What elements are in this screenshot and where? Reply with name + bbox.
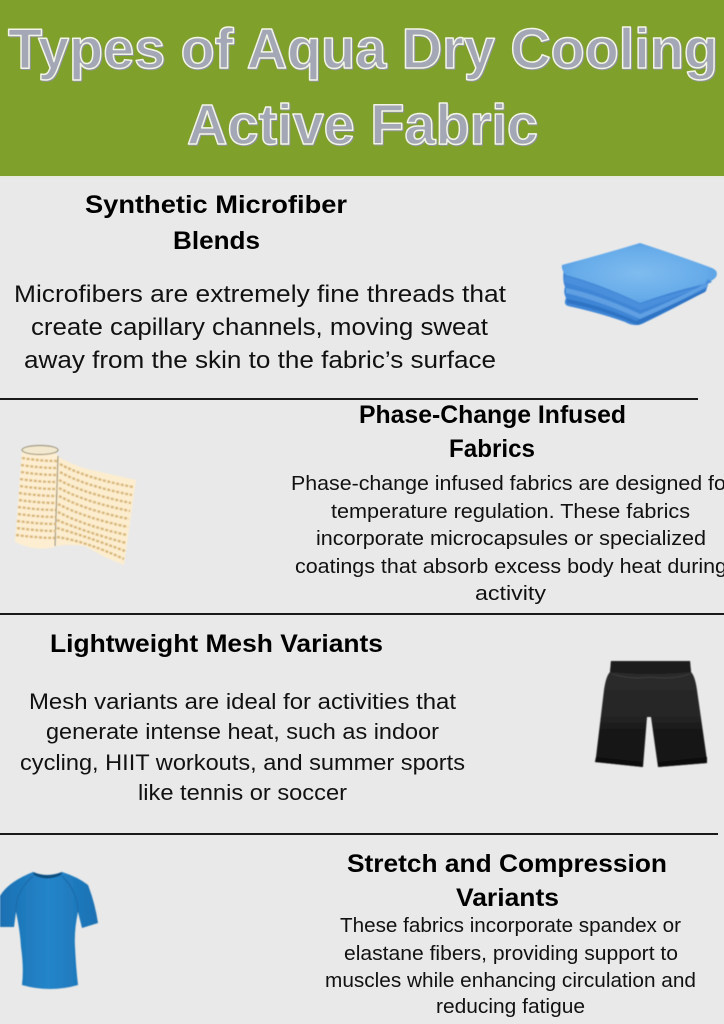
text block: microfibers: away from the skin to the fabric’s surface (24, 347, 496, 374)
text block: phase-change: incorporate microcapsules or specialized (316, 528, 706, 550)
divider (0, 398, 698, 400)
text block: stretch fabrics: muscles while enhancing circulation and (325, 970, 696, 992)
text block: phase-change: activity (475, 583, 546, 605)
heading: phase-change: Phase-Change Infused (359, 401, 626, 429)
text block: phase-change (291, 473, 724, 605)
heading: phase-change: Fabrics (449, 435, 535, 463)
text block: microfibers: Microfibers are extremely fine threads that (14, 281, 506, 308)
text block: stretch fabrics: These fabrics incorporate spandex or (340, 915, 681, 937)
icon: black shorts (595, 661, 707, 767)
divider (0, 613, 724, 615)
text block: mesh variants: Mesh variants are ideal for activities that (29, 689, 456, 714)
icon: folded blue towels (562, 243, 717, 325)
panel: phase-change infused fabrics (15, 401, 724, 605)
text block: phase-change: Phase-change infused fabrics are designed for (291, 473, 724, 495)
text block: mesh variants: like tennis or soccer (138, 780, 347, 805)
text block: mesh variants: generate intense heat, such as indoor (46, 719, 439, 744)
text block: stretch fabrics: reducing fatigue (436, 996, 585, 1018)
text block: mesh variants: cycling, HIIT workouts, and summer sports (20, 750, 465, 775)
heading: synthetic microfiber: Synthetic Microfiber (85, 191, 347, 219)
text block: stretch fabrics: elastane fibers, providing support to (344, 943, 678, 965)
heading: synthetic microfiber (85, 191, 347, 255)
heading: stretch and compression: Stretch and Compression (347, 850, 667, 878)
icon: blue t-shirt (0, 872, 98, 989)
panel: synthetic microfiber blends (14, 191, 717, 374)
icon: fabric roll (15, 446, 136, 565)
heading: lightweight mesh: Lightweight Mesh Variants (50, 630, 383, 658)
panel: lightweight mesh variants (20, 630, 707, 805)
panel: stretch and compression variants (0, 850, 696, 1018)
title (8, 17, 718, 157)
text block: microfibers (14, 281, 506, 374)
title: Active Fabric (187, 93, 538, 157)
heading: phase-change (359, 401, 626, 463)
text block: phase-change: coatings that absorb excess body heat during (295, 556, 724, 578)
divider (0, 833, 718, 835)
text block: mesh variants (20, 689, 465, 805)
text block: phase-change: temperature regulation. These fabrics (331, 501, 690, 523)
heading: synthetic microfiber: Blends (173, 227, 260, 255)
title: Types of Aqua Dry Cooling (8, 17, 718, 81)
text block: microfibers: create capillary channels, moving sweat (31, 314, 488, 341)
text block: stretch fabrics (325, 915, 696, 1018)
heading: stretch and compression: Variants (456, 884, 559, 912)
heading: stretch and compression (347, 850, 667, 912)
header banner (0, 0, 724, 178)
